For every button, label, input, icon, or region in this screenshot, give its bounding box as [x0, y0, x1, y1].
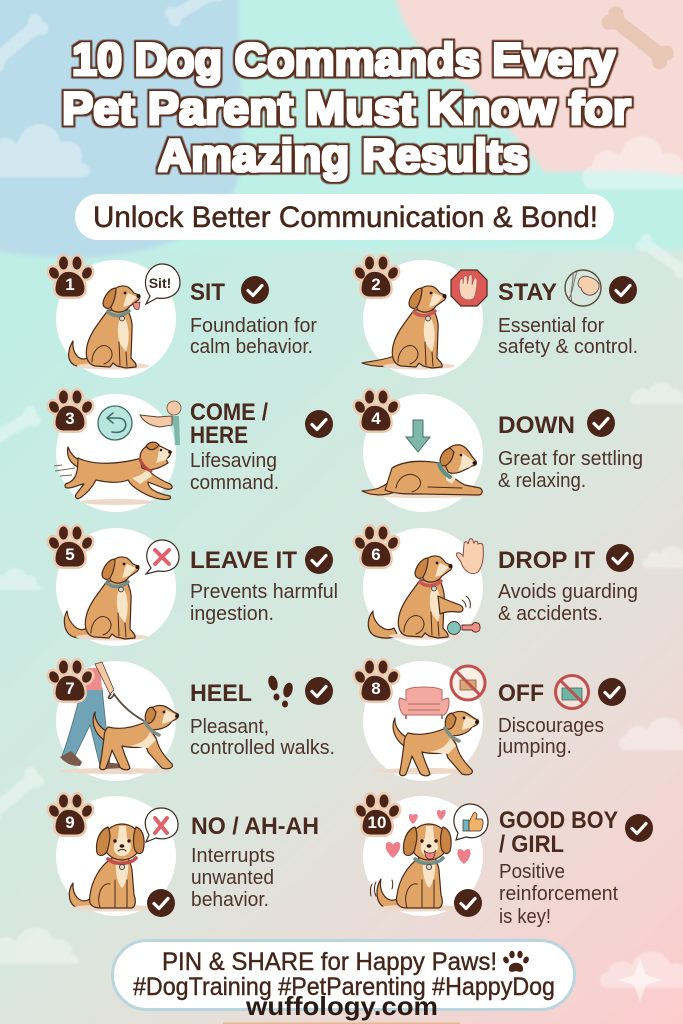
- description: jumping.: [497, 736, 572, 758]
- speech bubble: no: [145, 808, 178, 842]
- icon: toy: [448, 622, 480, 634]
- description: [190, 581, 338, 625]
- icon: person calling: [140, 401, 181, 445]
- label: DOWN: DOWN: [498, 412, 575, 439]
- description: Discourages: [498, 715, 604, 737]
- icon: dog dropping toy: [368, 556, 470, 640]
- description: is key!: [499, 906, 551, 928]
- label: COME / HERE: COME /: [190, 399, 268, 426]
- description: & relaxing.: [498, 470, 586, 492]
- description: Avoids guarding: [498, 581, 638, 603]
- speech bubble: thumbs up: [454, 804, 488, 840]
- icon: front-facing dog: [69, 824, 152, 912]
- hashtags: #DogTraining #PetParenting #HappyDog: [133, 973, 555, 1001]
- badge: 4: 4: [371, 409, 381, 428]
- website credit: wuffology.com: [245, 991, 438, 1021]
- description: behavior.: [191, 889, 269, 911]
- badge: 8: 8: [371, 679, 381, 698]
- description: Prevents harmful: [190, 581, 338, 603]
- panel: 3 COME / HERE: [47, 390, 333, 512]
- panel: 8 OFF: [353, 660, 626, 781]
- badge: 4: [353, 390, 400, 431]
- description: [190, 450, 279, 494]
- speech bubble: no: [146, 540, 179, 574]
- badge: 3: 3: [65, 409, 75, 428]
- badge: 2: 2: [371, 275, 381, 294]
- badge: 6: [353, 526, 400, 567]
- icon: no furniture sign: [451, 666, 485, 700]
- badge: 10: 10: [368, 813, 386, 832]
- icon: raised hand: [456, 539, 483, 574]
- icon: check: [454, 889, 482, 917]
- badge: 3: [47, 390, 94, 431]
- label: STAY: STAY: [498, 279, 557, 306]
- description: Interrupts: [191, 845, 275, 867]
- icon: sitting dog with flat tail: [362, 286, 455, 370]
- panel: 10 GOOD BOY / GIRL: [354, 794, 653, 928]
- icon: check: [147, 889, 175, 917]
- badge: 7: [47, 660, 94, 701]
- label: SIT: SIT: [190, 279, 225, 306]
- icon: leash: [109, 694, 148, 723]
- icon: sofa: [399, 687, 449, 719]
- description: [190, 716, 335, 759]
- icon: no jumping sign: [556, 676, 588, 708]
- description: & accidents.: [498, 603, 603, 625]
- description: command.: [190, 472, 279, 494]
- description: [498, 315, 638, 358]
- label: GOOD BOY / GIRL: [499, 807, 618, 858]
- label: HEEL: HEEL: [190, 680, 252, 707]
- description: ingestion.: [190, 603, 274, 625]
- panel: 6 DROP IT: [353, 526, 638, 646]
- label: NO / AH-AH: NO / AH-AH: [191, 813, 319, 840]
- description: [190, 315, 317, 358]
- description: reinforcement: [499, 883, 618, 905]
- description: [498, 581, 638, 625]
- icon: check: [305, 546, 333, 574]
- label: OFF: OFF: [498, 680, 544, 707]
- icon: paw: [502, 951, 530, 972]
- icon: check: [305, 410, 333, 438]
- call to action: PIN & SHARE for Happy Paws!: [162, 948, 497, 976]
- icon: sitting dog with curled tail: [69, 286, 149, 370]
- badge: 5: [47, 526, 94, 567]
- icon: happy dog: [370, 824, 459, 912]
- icon: footprints: [267, 675, 294, 708]
- icon: person walking: [60, 662, 124, 769]
- description: [191, 845, 275, 911]
- icon: check: [241, 276, 269, 304]
- icon: sitting dog: [64, 557, 148, 640]
- subtitle banner: Unlock Better Communication & Bond!: [93, 201, 598, 234]
- badge: 10: [354, 794, 401, 835]
- panel: 4 DOWN: [353, 390, 643, 512]
- label: COME / HERE: [190, 399, 268, 449]
- badge: 7: 7: [65, 679, 75, 698]
- panel: 2 STAY: [353, 256, 638, 378]
- footer banner: [112, 940, 574, 1010]
- description: [498, 448, 643, 492]
- label: COME / HERE: HERE: [190, 422, 248, 449]
- description: Positive: [499, 861, 565, 883]
- icon: lying dog: [362, 445, 485, 498]
- icon: check: [625, 814, 653, 842]
- icon: check: [305, 677, 333, 705]
- description: Pleasant,: [190, 716, 269, 738]
- title: 10 Dog Commands Every: [72, 34, 615, 85]
- speech bubble: Sit!: [145, 264, 180, 304]
- icon: stop sign hand: [451, 270, 487, 306]
- description: Essential for: [498, 315, 604, 337]
- label: GOOD BOY / GIRL: GOOD BOY: [499, 807, 618, 834]
- label: GOOD BOY / GIRL: / GIRL: [499, 831, 564, 858]
- description: safety & control.: [498, 336, 638, 358]
- icon: check: [609, 276, 637, 304]
- label: DROP IT: DROP IT: [498, 547, 595, 574]
- description: Great for settling: [498, 448, 643, 470]
- panel: 1 SIT: [47, 256, 317, 378]
- description: [497, 715, 604, 758]
- icon: walking dog: [393, 712, 479, 776]
- panel: 9 NO / AH-AH: [47, 794, 319, 917]
- speech bubble: Sit!: Sit!: [149, 275, 171, 291]
- title: [62, 34, 631, 181]
- icon: paw on hand circle: [565, 270, 601, 306]
- icon: check: [587, 409, 615, 437]
- description: controlled walks.: [190, 737, 335, 759]
- panel: 7 HEEL: [47, 660, 335, 781]
- badge: 9: [47, 794, 94, 835]
- icon: hearts: [386, 810, 471, 864]
- subtitle banner: [75, 194, 614, 240]
- icon: down arrow: [406, 420, 430, 452]
- icon: running dog: [54, 442, 172, 505]
- title: Pet Parent Must Know for: [62, 83, 631, 134]
- panel: 5 LEAVE IT: [47, 526, 338, 646]
- description: calm behavior.: [190, 336, 313, 358]
- badge: 2: [353, 256, 400, 297]
- badge: 8: [353, 660, 400, 701]
- icon: check: [598, 678, 626, 706]
- badge: 1: [47, 256, 94, 297]
- label: LEAVE IT: LEAVE IT: [190, 547, 297, 574]
- icon: walking dog: [93, 706, 179, 770]
- description: Foundation for: [190, 315, 317, 337]
- badge: 5: 5: [65, 545, 75, 564]
- bottom accent line: [223, 1022, 460, 1024]
- description: [499, 861, 618, 928]
- icon: check: [606, 544, 634, 572]
- description: Lifesaving: [190, 450, 277, 472]
- icon: recall arrow: [98, 406, 132, 440]
- description: unwanted: [191, 867, 274, 889]
- title: Amazing Results: [158, 130, 528, 181]
- badge: 9: 9: [65, 813, 75, 832]
- badge: 6: 6: [371, 545, 381, 564]
- badge: 1: 1: [65, 275, 75, 294]
